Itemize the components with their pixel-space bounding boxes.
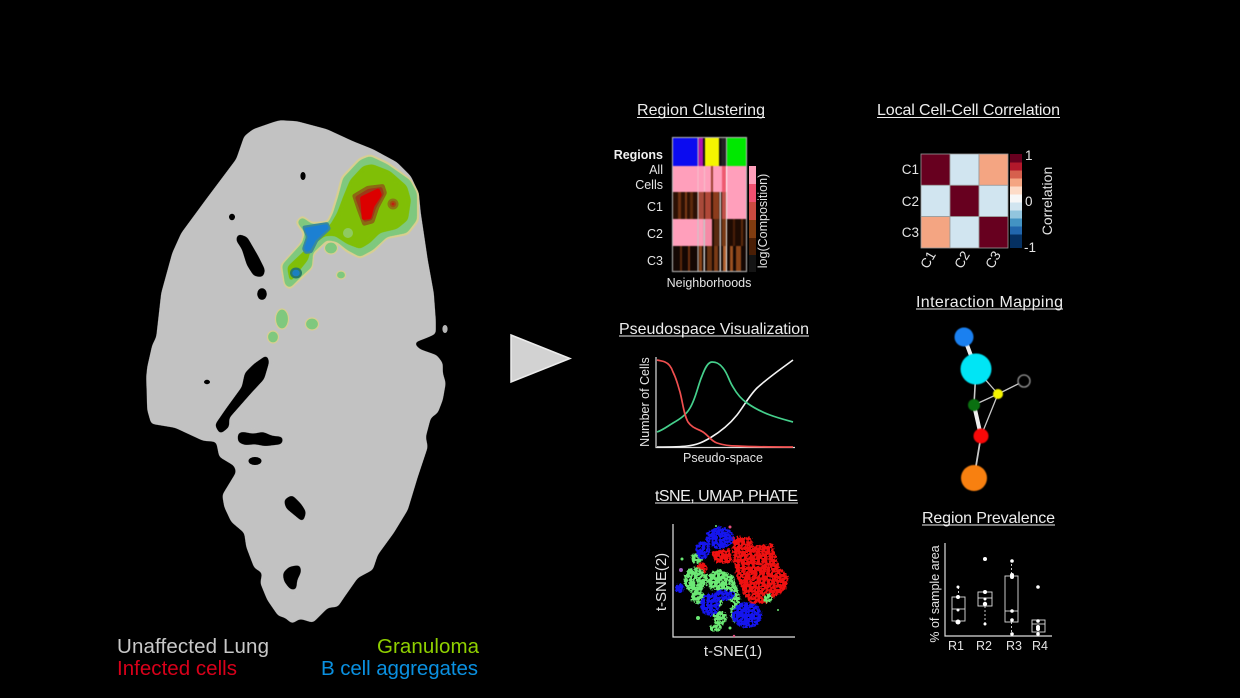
box plot x labels: R2 [976,639,992,653]
box plot x labels: R1 [948,639,964,653]
box plot points [956,557,1040,636]
heatmap row labels: Regions [614,148,663,162]
correlation matrix [921,154,1008,248]
tSNE axes [673,524,795,637]
secondary infected spot [388,198,398,210]
heading: tSNE: tSNE, UMAP, PHATE [655,488,798,505]
composition colour scale [749,166,756,272]
panel: interaction mapping [916,294,1063,491]
panel: lung tissue map [146,120,448,624]
box plot y label: % of sample area [928,545,942,643]
curve: red [657,360,793,447]
granuloma outer edge [280,154,419,290]
legend: lung map [117,635,480,680]
heading: interaction mapping: Interaction Mapping [916,294,1063,311]
heading: region clustering: Region Clustering [637,102,765,119]
heatmap row labels: C2 [647,227,663,241]
all cells row [673,166,746,192]
correlation colour bar [1010,154,1022,248]
lung outline with airway holes [146,120,446,624]
legend: infected cells: Infected cells [117,657,237,680]
network edges [964,337,1024,478]
tSNE y label: t-SNE(2) [653,553,670,611]
pseudospace y label: Number of Cells [638,357,652,447]
C3 row [673,246,746,271]
heading: region prevalence: Region Prevalence [922,510,1055,527]
legend: B cell aggregates: B cell aggregates [321,657,478,680]
pseudospace axes [656,357,795,448]
matrix row labels: C1 [902,162,919,177]
legend: unaffected lung: Unaffected Lung [117,635,269,658]
panel: region prevalence [922,510,1055,653]
tSNE x label: t-SNE(1) [704,643,762,660]
heatmap row labels: C3 [647,254,663,268]
network nodes [954,328,1030,491]
red clusters [696,537,789,604]
panel: local cell-cell correlation [877,102,1060,271]
C1 row [673,192,746,219]
regions row [673,138,746,166]
curve: white [657,360,793,447]
matrix row labels [902,162,919,240]
matrix column labels: C3 [982,249,1004,271]
matrix column labels [917,249,1004,271]
heading: correlation: Local Cell-Cell Correlation [877,102,1060,119]
B cell aggregate main [304,224,329,252]
heatmap x label: Neighborhoods [667,276,751,290]
colour bar ticks: 1 [1025,148,1033,163]
green clusters [684,552,772,632]
heatmap row labels: Cells [635,178,663,192]
colour bar ticks: 0 [1025,194,1033,209]
box plot x labels [948,639,1048,653]
colour bar label: Correlation [1039,167,1055,235]
B cell aggregate edge [302,222,331,254]
panel: region clustering [614,102,770,290]
infected cells core [352,184,387,226]
lighter patch in granuloma [343,228,353,238]
infected cells mid contour [355,187,384,222]
tSNE scatter [676,527,789,632]
granuloma density contours [268,154,419,343]
infected cells centre [360,188,382,220]
heatmap row labels: All [649,163,663,177]
stray tSNE points [679,525,779,637]
granuloma core [287,164,411,283]
arrow [511,335,570,382]
box plot axes [945,543,1052,636]
scale label: log(Composition) [756,174,770,268]
granuloma outer contour [282,156,417,288]
small airway holes [204,172,306,465]
legend: granuloma: Granuloma [377,635,480,658]
matrix row labels: C3 [902,225,919,240]
box plot x labels: R4 [1032,639,1048,653]
pseudospace x label: Pseudo-space [683,451,763,465]
matrix column labels: C1 [917,249,939,271]
small detached tissue fragment [442,325,448,333]
curve: green [657,362,793,432]
heatmap [672,137,747,272]
panel: pseudospace visualization [619,321,809,465]
box plot boxes [952,560,1045,634]
satellite lesions [268,242,346,343]
blue clusters [676,527,762,628]
B cell aggregate small [290,268,302,278]
matrix column labels: C2 [951,249,973,271]
heatmap column separators [698,192,727,272]
matrix row labels: C2 [902,194,919,209]
heading: pseudospace: Pseudospace Visualization [619,321,809,338]
colour bar ticks: -1 [1024,240,1036,255]
heatmap row labels: C1 [647,200,663,214]
panel: tSNE, UMAP, PHATE [653,488,798,660]
C2 row [673,219,746,246]
colour bar ticks [1024,148,1036,255]
box plot x labels: R3 [1006,639,1022,653]
heatmap frame [672,137,747,272]
heatmap row labels [614,148,663,268]
